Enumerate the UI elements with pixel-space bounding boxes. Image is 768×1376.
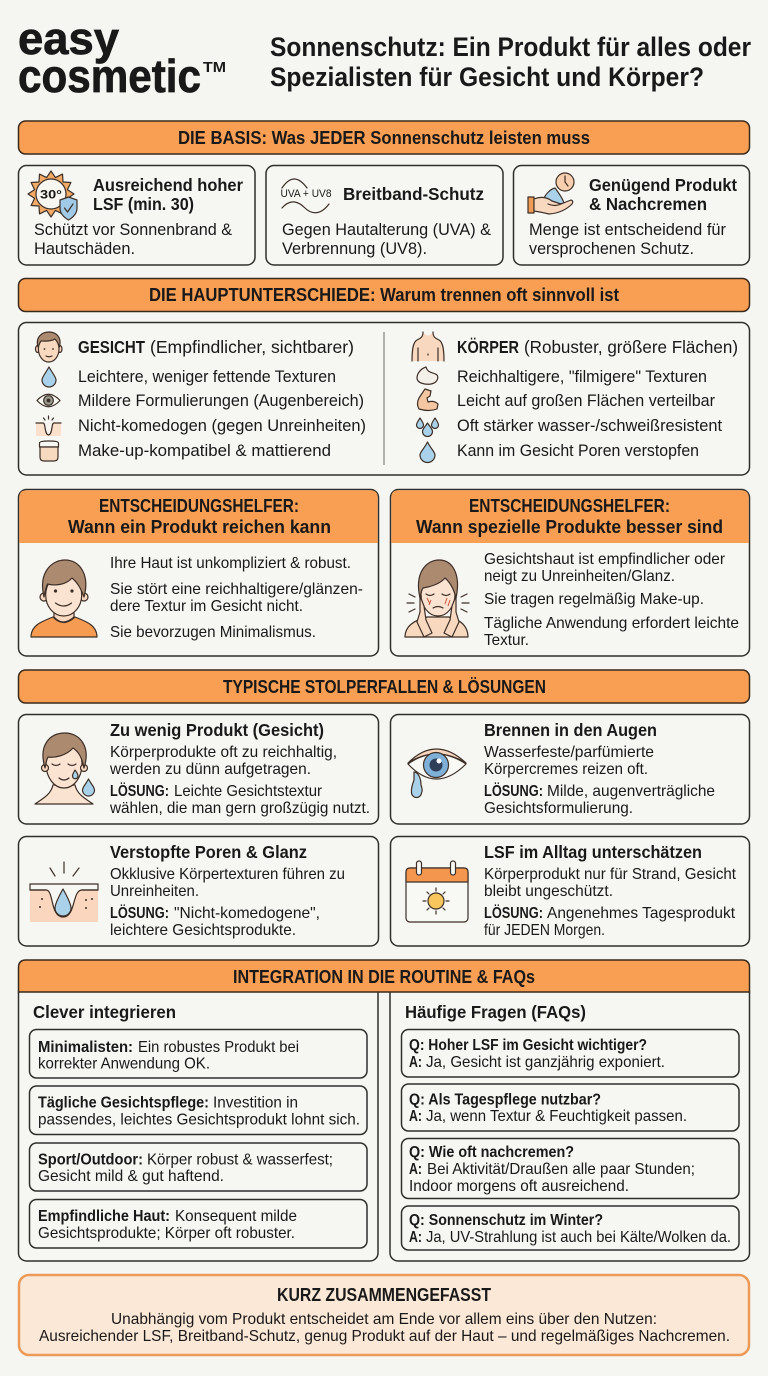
text block <box>110 866 345 939</box>
icon: eye with tear <box>408 749 466 798</box>
faq: hoher LSF: Ja, Gesicht ist ganzjährig exponiert. <box>426 1054 665 1071</box>
column: FAQs <box>402 1002 739 1250</box>
text block: Ausreichender LSF, Breitband-Schutz, genug Produkt auf der Haut – und regelmäßiges Nachcremen. <box>39 1328 730 1345</box>
text block: leichtere Gesichtsprodukte. <box>110 922 296 939</box>
faq: winter <box>402 1206 739 1250</box>
logo: easy cosmetic: TM <box>203 59 226 76</box>
faq: winter: Ja, UV-Strahlung ist auch bei Kälte/Wolken da. <box>426 1229 731 1246</box>
card: minimalisten: Ein robustes Produkt bei <box>138 1039 299 1056</box>
text block: Sie stört eine reichhaltigere/glänzen- <box>110 581 363 598</box>
title: Spezialisten für Gesicht und Körper? <box>270 62 704 92</box>
text block: Wasserfeste/parfümierte <box>484 744 654 761</box>
heading: LSF im Alltag unterschätzen <box>484 842 702 862</box>
section banner: integration: INTEGRATION IN DIE ROUTINE & FAQs <box>233 966 535 987</box>
heading <box>68 495 331 537</box>
section banner: integration <box>18 960 750 992</box>
text: verteilbar: Leicht auf großen Flächen verteilbar <box>457 392 715 410</box>
icon: cream dollop <box>417 367 438 384</box>
text block: werden zu dünn aufgetragen. <box>109 761 311 778</box>
panel: verstopfte poren <box>18 836 378 946</box>
card: tägliche gesichtspflege: passendes, leichtes Gesichtsprodukt lohnt sich. <box>38 1112 360 1128</box>
faq: nachcremen <box>402 1138 739 1198</box>
heading: Zu wenig Produkt (Gesicht) <box>110 720 324 740</box>
heading: Ausreichend hoher <box>93 175 243 195</box>
text block <box>529 221 726 258</box>
faq: nachcremen: Q: Wie oft nachcremen? <box>409 1144 574 1161</box>
card: minimalisten: Minimalisten: <box>38 1039 133 1056</box>
text: wasserresistent: Oft stärker wasser-/schweißresistent <box>457 417 722 435</box>
heading: Brennen in den Augen <box>484 720 657 740</box>
text: poren: Kann im Gesicht Poren verstopfen <box>457 442 699 460</box>
faq: hoher LSF: Q: Hoher LSF im Gesicht wichtiger? <box>409 1037 647 1054</box>
card: tägliche gesichtspflege: Tägliche Gesichtspflege: <box>38 1094 209 1112</box>
faq: winter: A: <box>409 1229 422 1246</box>
panel: zu wenig produkt <box>18 714 378 824</box>
text block <box>39 1311 730 1345</box>
text block: Angenehmes Tagesprodukt <box>547 905 736 922</box>
logo: easy cosmetic <box>18 13 226 102</box>
card: sport outdoor: Körper robust & wasserfest; <box>147 1152 333 1168</box>
faq: winter: Q: Sonnenschutz im Winter? <box>409 1212 603 1229</box>
icon: flexed arm <box>418 389 438 410</box>
text: komedogen: Nicht-komedogen (gegen Unreinheiten) <box>78 417 366 435</box>
panel: ausreichend hoher LSF <box>18 166 255 265</box>
column: clever integrieren <box>30 1002 367 1248</box>
logo: easy cosmetic: cosmetic <box>18 50 201 102</box>
text block: Verbrennung (UV8). <box>282 240 427 258</box>
icon: pore <box>36 416 61 436</box>
panel: gesicht vs körper <box>18 322 750 475</box>
heading: ENTSCHEIDUNGSHELFER: <box>99 495 299 516</box>
heading: Breitband-Schutz <box>343 184 484 204</box>
text block <box>34 221 232 258</box>
icon: calendar with sun <box>406 861 468 922</box>
card: minimalisten <box>30 1030 367 1078</box>
text block: Schützt vor Sonnenbrand & <box>34 221 232 239</box>
icon: face <box>36 332 62 362</box>
text block: Sie bevorzugen Minimalismus. <box>110 624 316 641</box>
icon: torso <box>412 332 444 361</box>
section banner: hauptunterschiede: DIE HAUPTUNTERSCHIEDE: Warum trennen oft sinnvoll ist <box>149 284 619 305</box>
section banner: die basis: DIE BASIS: Was JEDER Sonnenschutz leisten muss <box>178 127 590 148</box>
heading: Verstopfte Poren & Glanz <box>110 842 307 862</box>
text block: Textur. <box>484 632 529 649</box>
text block: Gesichtshaut ist empfindlicher oder <box>484 551 725 568</box>
text block: Unabhängig vom Produkt entscheidet am Ende vor allem eins über den Nutzen: <box>111 1311 657 1328</box>
text block: Hautschäden. <box>34 240 135 258</box>
faq: tagespflege: Ja, wenn Textur & Feuchtigkeit passen. <box>426 1108 687 1125</box>
card: empfindliche haut <box>30 1200 367 1248</box>
text block <box>484 866 737 939</box>
heading: Wann ein Produkt reichen kann <box>68 516 331 537</box>
section banner: hauptunterschiede <box>18 278 750 312</box>
text block: Körpercremes reizen oft. <box>484 761 648 778</box>
heading: KURZ ZUSAMMENGEFASST <box>277 1284 492 1305</box>
logo: easy cosmetic: easy <box>18 13 119 64</box>
icon: person with sensitive skin <box>405 560 469 637</box>
text: make-up: Make-up-kompatibel & mattierend <box>78 442 331 460</box>
title <box>270 32 751 92</box>
heading: LSF (min. 30) <box>93 194 194 214</box>
faq: nachcremen: Bei Aktivität/Draußen alle paar Stunden; <box>427 1161 695 1178</box>
heading: KÖRPER <box>457 337 519 357</box>
icon: UVA and UVB waves <box>280 179 332 213</box>
text: formulierungen: Mildere Formulierungen (Augenbereich) <box>78 392 364 410</box>
text block <box>110 555 363 641</box>
text block: neigt zu Unreinheiten/Glanz. <box>484 568 675 585</box>
column: gesicht <box>36 332 366 461</box>
text block: Gesichtsformulierung. <box>484 800 633 817</box>
text block <box>109 744 370 817</box>
heading: (Empfindlicher, sichtbarer) <box>150 337 354 357</box>
card: sport outdoor: Gesicht mild & gut haftend. <box>38 1168 224 1185</box>
heading: Clever integrieren <box>33 1002 176 1022</box>
panel: integration und FAQs <box>18 960 750 1261</box>
card: empfindliche haut: Gesichtsprodukte; Körper oft robuster. <box>38 1225 295 1242</box>
faq: hoher LSF <box>402 1030 739 1077</box>
text block: bleibt ungeschützt. <box>484 883 613 900</box>
text block: dere Textur im Gesicht nicht. <box>110 598 303 615</box>
panel: kurz zusammengefasst <box>19 1275 749 1355</box>
text block: Ihre Haut ist unkompliziert & robust. <box>110 555 351 572</box>
card: tägliche gesichtspflege <box>30 1086 367 1134</box>
faq: tagespflege <box>402 1084 739 1131</box>
section banner: stolperfallen: TYPISCHE STOLPERFALLEN & LÖSUNGEN <box>223 676 546 697</box>
text block: Gegen Hautalterung (UVA) & <box>282 221 491 239</box>
heading: Genügend Produkt <box>589 175 737 195</box>
heading <box>93 175 243 214</box>
text block <box>282 221 491 258</box>
card: empfindliche haut: Empfindliche Haut: <box>38 1208 170 1225</box>
icon: face with drop <box>35 733 94 804</box>
text block: Tägliche Anwendung erfordert leichte <box>484 615 739 632</box>
text block: wählen, die man gern großzügig nutzt. <box>109 800 370 817</box>
text block <box>484 744 715 817</box>
icon: three drops <box>416 418 438 436</box>
text block: Milde, augenverträgliche <box>547 783 715 800</box>
text block: Körperprodukte oft zu reichhaltig, <box>110 744 337 761</box>
icon: sun with SPF 30 and shield: 30° <box>40 188 62 202</box>
text block: Leichte Gesichtstextur <box>174 783 322 800</box>
section banner: stolperfallen <box>18 670 750 703</box>
card: minimalisten: korrekter Anwendung OK. <box>38 1056 210 1072</box>
panel: brennen in den augen <box>390 714 750 824</box>
icon: hand with cream and clock <box>528 173 574 214</box>
faq: nachcremen: A: <box>409 1161 422 1178</box>
card: tägliche gesichtspflege: Investition in <box>213 1094 298 1112</box>
text block <box>484 551 739 649</box>
section banner: die basis <box>18 121 750 154</box>
text block: LÖSUNG: <box>110 905 169 922</box>
heading: ENTSCHEIDUNGSHELFER: <box>469 495 670 516</box>
text: texturen: Leichtere, weniger fettende Texturen <box>78 368 336 386</box>
card: sport outdoor: Sport/Outdoor: <box>38 1152 143 1168</box>
text block: LÖSUNG: <box>110 783 169 800</box>
icon: jar <box>40 441 58 461</box>
text block: LÖSUNG: <box>484 783 543 800</box>
icon: UVA and UVB waves: UVA + UV8 <box>280 188 332 200</box>
text block: "Nicht-komedogene", <box>174 905 320 922</box>
text block: für JEDEN Morgen. <box>484 922 605 939</box>
icon: happy person <box>31 560 97 637</box>
text: texturen: Reichhaltigere, "filmigere" Texturen <box>457 368 707 386</box>
icon: drop <box>420 442 435 462</box>
icon: clogged pore <box>30 862 98 922</box>
panel: breitband-schutz <box>266 166 503 265</box>
text block: Körperprodukt nur für Strand, Gesicht <box>484 866 737 883</box>
text block: Sie tragen regelmäßig Make-up. <box>484 591 704 608</box>
icon: eye <box>37 394 60 407</box>
panel: ein produkt reicht <box>18 490 378 656</box>
card: sport outdoor <box>30 1143 367 1191</box>
faq: hoher LSF: A: <box>409 1054 422 1071</box>
heading: (Robuster, größere Flächen) <box>524 337 738 357</box>
heading <box>589 175 737 214</box>
icon: drop <box>42 367 56 387</box>
heading: GESICHT <box>78 337 145 357</box>
panel: spezielle produkte <box>390 490 750 656</box>
text block: Menge ist entscheidend für <box>529 221 726 239</box>
card: empfindliche haut: Konsequent milde <box>175 1208 297 1225</box>
heading <box>416 495 723 537</box>
faq: tagespflege: A: <box>409 1108 422 1125</box>
icon: sun with SPF 30 and shield <box>28 171 77 220</box>
column: körper <box>412 332 738 462</box>
heading: Häufige Fragen (FAQs) <box>405 1002 586 1022</box>
text block: LÖSUNG: <box>484 905 543 922</box>
text block: Okklusive Körpertexturen führen zu <box>110 866 345 883</box>
faq: nachcremen: Indoor morgens oft ausreichend. <box>409 1178 629 1195</box>
panel: LSF im alltag <box>390 836 750 946</box>
faq: tagespflege: Q: Als Tagespflege nutzbar? <box>409 1092 601 1108</box>
text block: Unreinheiten. <box>110 883 199 900</box>
panel: genügend produkt <box>514 166 750 265</box>
heading: Wann spezielle Produkte besser sind <box>416 516 723 537</box>
text block: versprochenen Schutz. <box>529 240 694 258</box>
heading: & Nachcremen <box>589 194 707 214</box>
